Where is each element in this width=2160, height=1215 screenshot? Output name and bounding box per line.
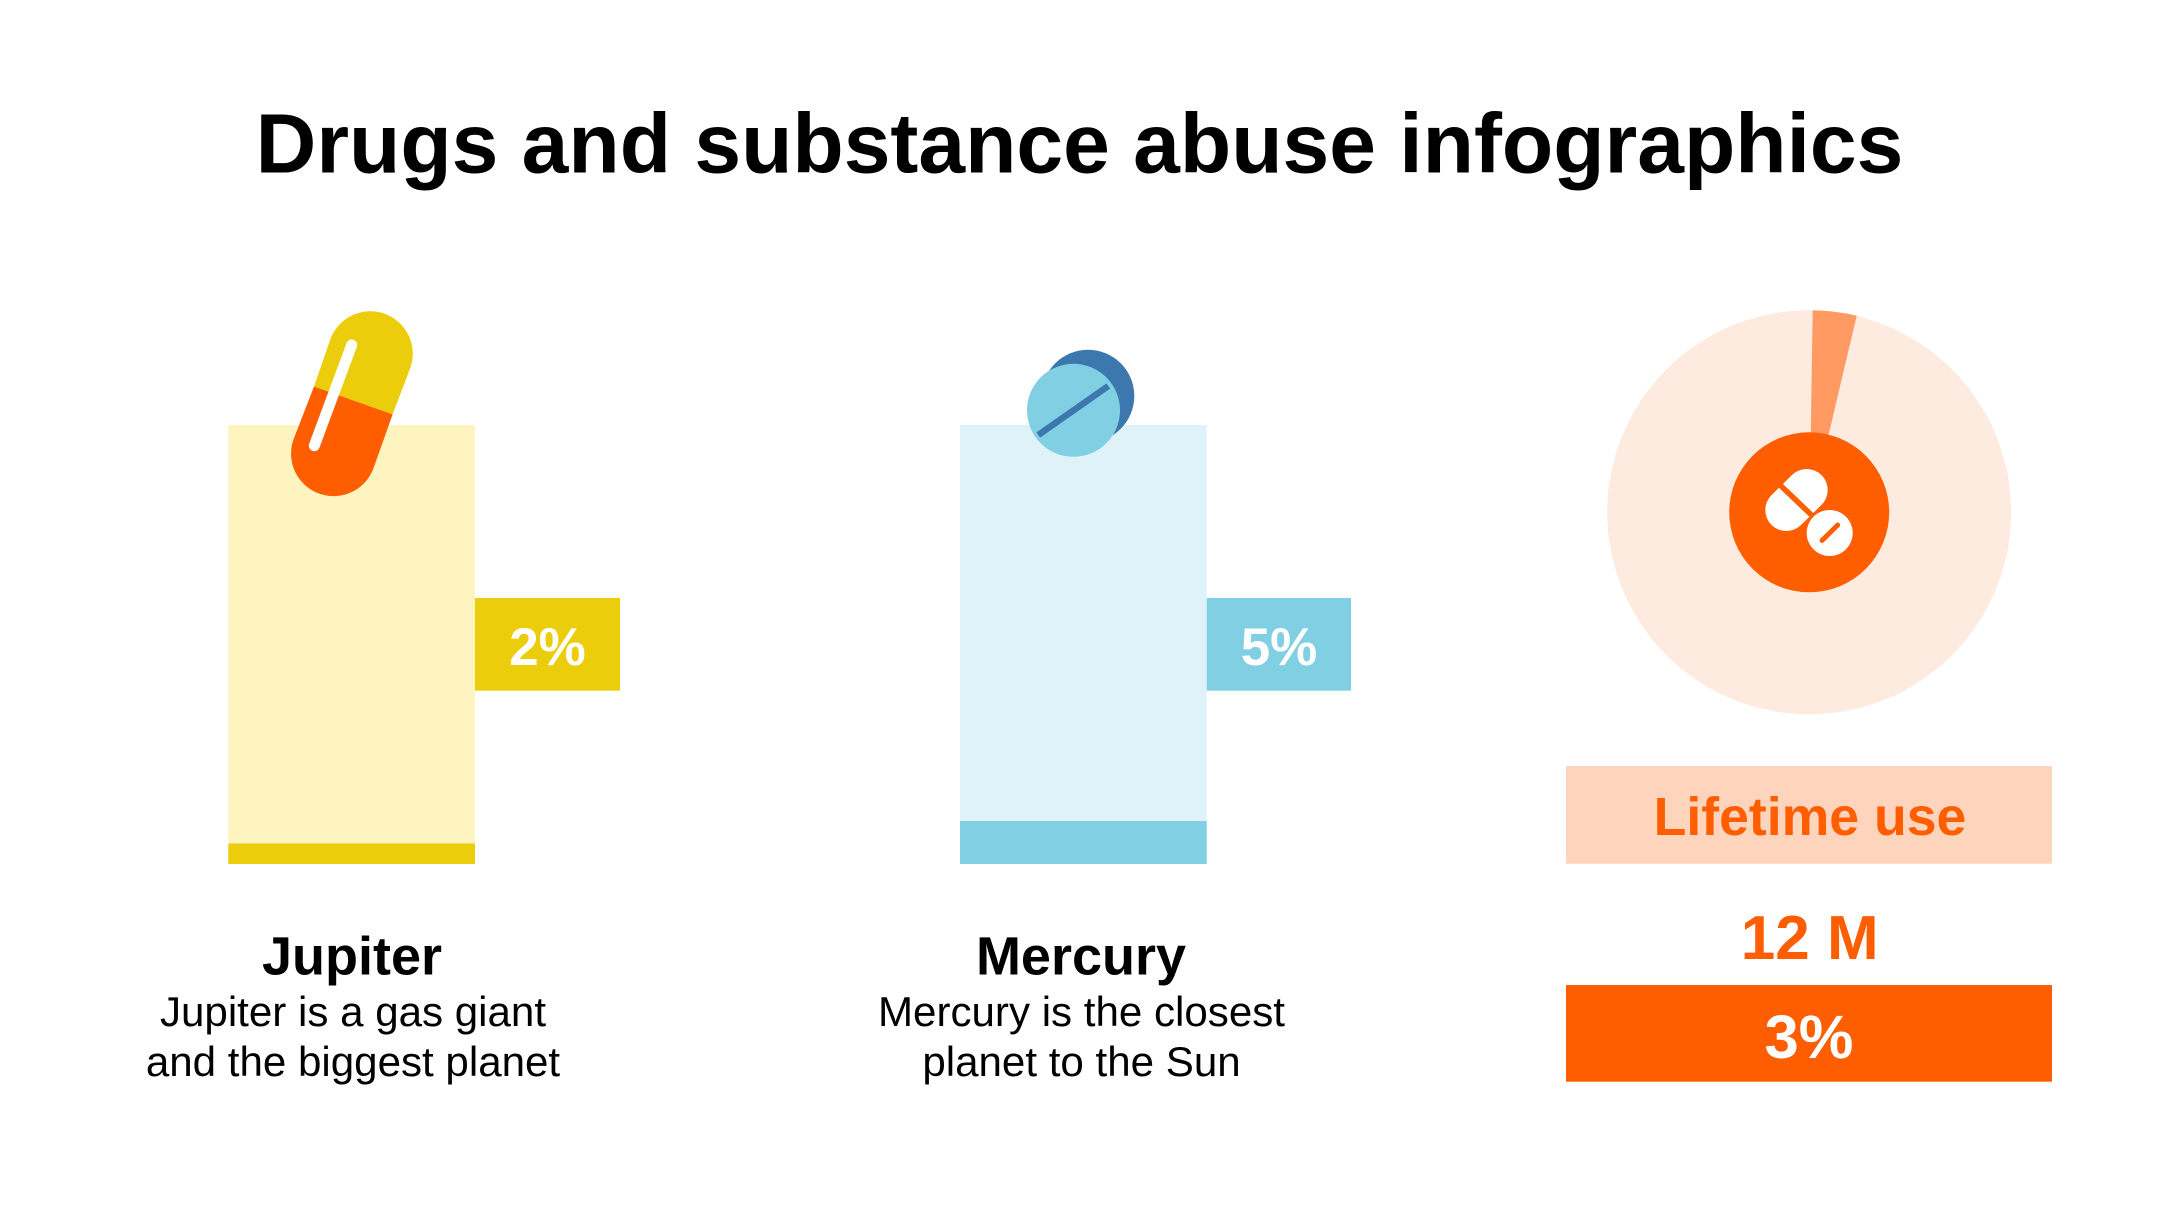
- panel: lifetime use: [1566, 310, 2052, 1082]
- Mercury bar fill: [960, 821, 1207, 864]
- Mercury label: Mercury: [976, 926, 1186, 986]
- 12 M value: 12 M: [1741, 904, 1879, 973]
- Jupiter bar background: [228, 425, 475, 864]
- 3% bar: [1566, 985, 2052, 1082]
- Jupiter description: Jupiter is a gas giant: [160, 988, 546, 1035]
- Jupiter label: Jupiter: [262, 926, 442, 986]
- Jupiter bar fill: [228, 844, 475, 864]
- lifetime use label: Lifetime use: [1654, 787, 1966, 847]
- pie chart: [1607, 310, 2011, 714]
- Jupiter percent badge: 2%: [509, 618, 586, 677]
- Mercury bar background: [960, 425, 1207, 864]
- Mercury percent badge: 5%: [1241, 618, 1317, 677]
- icon: round tablet: [1027, 350, 1134, 457]
- panel: Jupiter: [146, 311, 620, 1085]
- panel: Mercury: [878, 350, 1351, 1085]
- lifetime use label: [1566, 766, 2052, 864]
- Mercury description: planet to the Sun: [922, 1038, 1241, 1085]
- Jupiter percent badge: [475, 598, 620, 691]
- title: Drugs and substance abuse infographics: [256, 96, 1903, 190]
- Mercury description: Mercury is the closest: [878, 988, 1285, 1035]
- Mercury percent badge: [1207, 598, 1351, 691]
- icon: capsule pill: [291, 311, 413, 496]
- 3% bar: 3%: [1765, 1003, 1853, 1072]
- icon: pills in orange circle: [1729, 432, 1889, 592]
- Jupiter description: and the biggest planet: [146, 1038, 560, 1085]
